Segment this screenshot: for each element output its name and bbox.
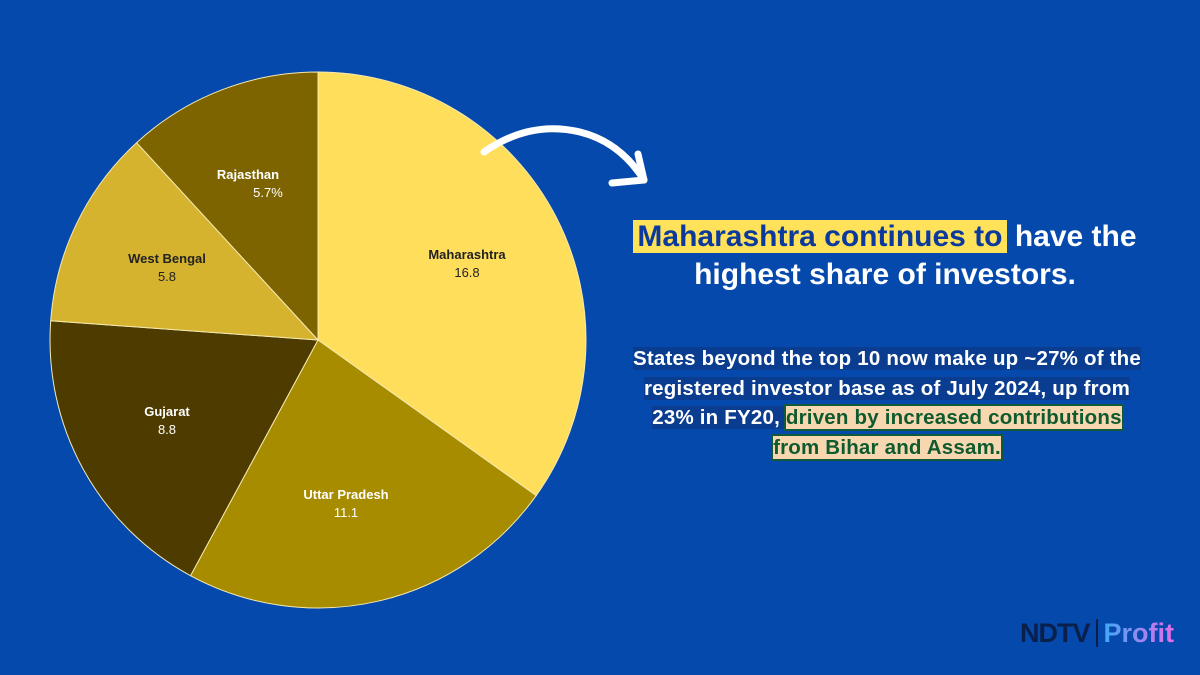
body text: from Bihar and Assam. — [773, 436, 1001, 458]
slice: Rajasthan: Rajasthan — [217, 167, 279, 182]
headline: Maharashtra continues to have the — [637, 220, 1137, 253]
slice: Maharashtra: 16.8 — [454, 265, 480, 280]
slice: Rajasthan: 5.7% — [253, 185, 283, 200]
headline: highest share of investors. — [694, 258, 1076, 291]
slice: Gujarat: Gujarat — [144, 404, 190, 419]
logo: NDTV Profit: NDTV Profit — [1020, 618, 1174, 648]
pie chart — [50, 72, 586, 608]
body text: 23% in FY20, driven by increased contributions — [652, 406, 1122, 429]
slice: Gujarat — [50, 321, 318, 576]
slice: West Bengal: West Bengal — [128, 251, 206, 266]
body text — [633, 347, 1141, 461]
slice: Rajasthan — [137, 72, 318, 340]
body text: States beyond the top 10 now make up ~27% of the — [633, 347, 1141, 370]
slice: Gujarat: 8.8 — [158, 422, 176, 437]
slice: Uttar Pradesh: 11.1 — [334, 505, 358, 520]
arrow — [480, 125, 648, 186]
headline — [633, 220, 1137, 291]
slice: West Bengal: 5.8 — [158, 269, 176, 284]
slice: Uttar Pradesh — [190, 340, 536, 608]
slice: Maharashtra — [318, 72, 586, 496]
body text: registered investor base as of July 2024, up from — [644, 376, 1130, 400]
slice: Maharashtra: Maharashtra — [428, 247, 506, 262]
slice: Uttar Pradesh: Uttar Pradesh — [303, 487, 389, 502]
slice: West Bengal — [51, 143, 318, 340]
